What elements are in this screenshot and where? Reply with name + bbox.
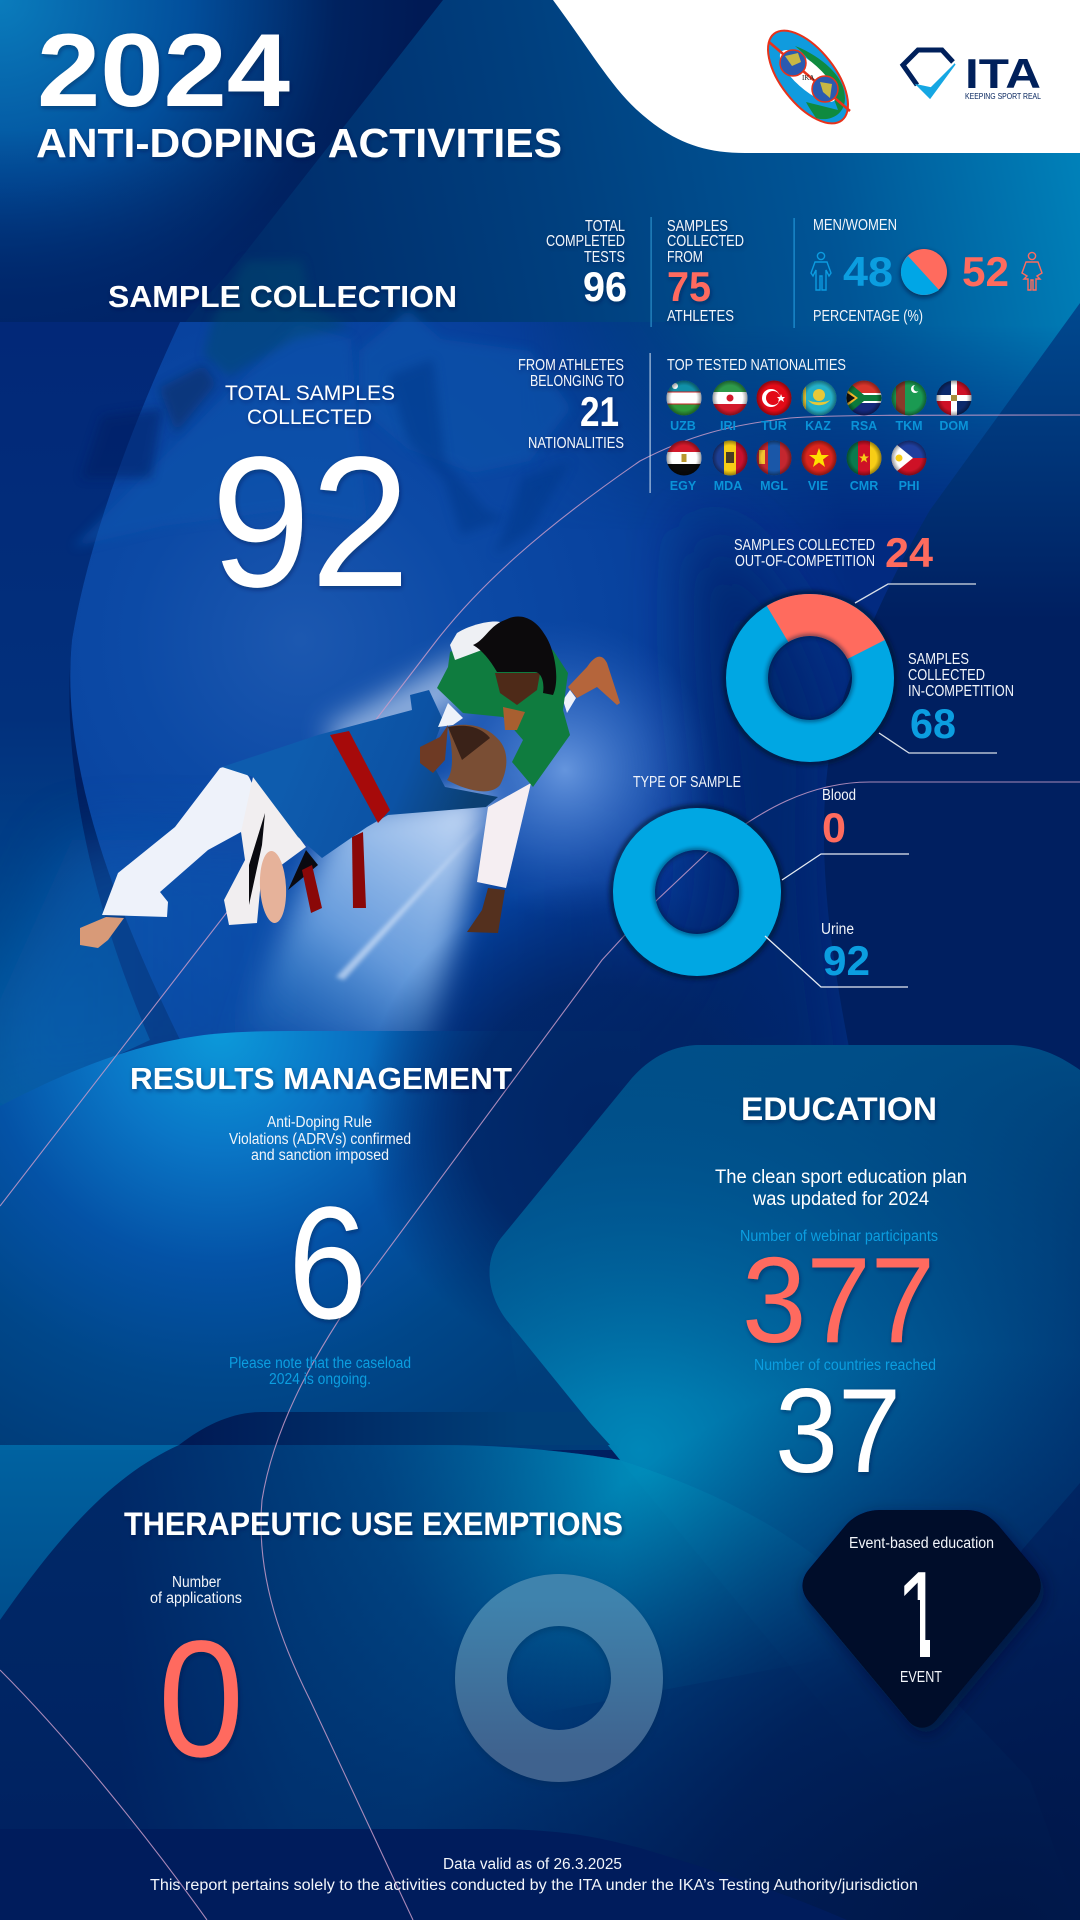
stat: countries reached: 37 (775, 1364, 901, 1498)
heading: sample collection: SAMPLE COLLECTION (108, 279, 457, 314)
stat: webinar participants: 377 (742, 1232, 935, 1368)
note: caseload: Please note that the caseload (229, 1355, 411, 1372)
panel: event-based education: 1 (896, 1546, 944, 1682)
flag: IRI (712, 380, 748, 416)
callout: in competition: COLLECTED (908, 667, 985, 684)
white header panel (553, 0, 1080, 153)
title: 2024 (37, 13, 290, 129)
label: number of applications (150, 1574, 242, 1607)
top-left band (0, 0, 442, 270)
label: number of applications: of applications (150, 1590, 242, 1607)
dark glow to the right (669, 527, 848, 1045)
flag labels row 1: TKM (895, 419, 923, 433)
chart: samples by competition donut (725, 593, 895, 763)
hanging belt ends (302, 832, 366, 913)
panel: results management (130, 1061, 512, 1388)
callout: out of competition: OUT-OF-COMPETITION (735, 553, 875, 570)
flag labels row 2: CMR (850, 479, 878, 493)
stat: athletes: SAMPLES (667, 218, 728, 235)
stat: nationalities: FROM ATHLETES (518, 357, 624, 374)
text: plan (715, 1167, 967, 1210)
flag labels row 1: TUR (761, 419, 787, 433)
panel: education (715, 1091, 967, 1498)
stat: athletes (667, 218, 744, 325)
mat left (0, 322, 180, 1110)
stat: total completed tests (546, 218, 627, 310)
hand under chin (503, 707, 525, 730)
stat: total completed tests: TOTAL (585, 218, 625, 235)
pie: men women (900, 249, 948, 298)
note: caseload (229, 1355, 411, 1388)
note: caseload: 2024 is ongoing. (269, 1371, 371, 1388)
flag: RSA (846, 380, 882, 416)
lower body band (0, 818, 319, 1094)
stat: countries reached: Number of countries reached (754, 1357, 936, 1374)
icon: woman (1022, 252, 1042, 290)
total samples collected: TOTAL SAMPLES (225, 382, 395, 405)
text: plan: The clean sport education plan (715, 1167, 967, 1188)
badge shape (802, 1510, 1041, 1728)
education panel (490, 1046, 1080, 1558)
panel: event-based education: EVENT (900, 1669, 942, 1686)
stat: total completed tests: 96 (583, 263, 627, 310)
callout: blood: 0 (822, 804, 846, 851)
dark hair (473, 616, 556, 695)
stat: athletes: COLLECTED (667, 233, 744, 250)
top-right panel behind the stats (180, 0, 1080, 330)
raised foot (568, 657, 620, 705)
callout: blood (782, 787, 909, 880)
description: adrvs: Anti-Doping Rule (267, 1114, 372, 1131)
stat: men / women: PERCENTAGE (%) (813, 308, 923, 325)
total samples collected: 92 (211, 419, 410, 626)
logo: ITA: KEEPING SPORT REAL (965, 91, 1041, 101)
number: applications: 0 (158, 1607, 244, 1792)
flag: DOM (936, 380, 972, 416)
light beams (325, 650, 470, 765)
arm (420, 725, 448, 773)
heading: results management: RESULTS MANAGEMENT (130, 1061, 512, 1096)
flag: KAZ (801, 380, 837, 416)
flag: UZB (666, 380, 702, 416)
top tested nationalities (666, 357, 972, 493)
footer (150, 1856, 918, 1894)
white sleeve (438, 703, 463, 727)
flag labels row 2: VIE (808, 479, 828, 493)
heading: education: EDUCATION (741, 1091, 937, 1127)
white collar (450, 622, 500, 660)
flag: PHI (891, 440, 927, 476)
label: type of sample: TYPE OF SAMPLE (633, 774, 741, 791)
title (36, 13, 562, 166)
text: plan: was updated for 2024 (752, 1189, 929, 1210)
flag: MGL (756, 440, 792, 476)
callout: in competition: IN-COMPETITION (908, 683, 1014, 700)
blonde hair (447, 725, 506, 791)
stat: men / women: 48 (843, 248, 893, 295)
dark band with tip (179, 1412, 610, 1445)
dark navy right triangle (1022, 1484, 1080, 1574)
number: adrvs: 6 (288, 1173, 367, 1352)
total samples collected: COLLECTED (247, 406, 372, 429)
chart: type of sample donut (612, 807, 782, 977)
label: number of applications: Number (172, 1574, 221, 1591)
flag: EGY (666, 440, 702, 476)
description: adrvs: Violations (ADRVs) confirmed (229, 1131, 411, 1148)
flag: MDA (712, 440, 748, 476)
stat: men / women: 52 (962, 248, 1009, 295)
highlight where panels overlap (455, 1446, 814, 1688)
stat: countries reached (754, 1357, 936, 1498)
flag labels row 1: DOM (939, 419, 969, 433)
callout: in competition: 68 (910, 700, 956, 747)
callout: in competition: SAMPLES (908, 651, 969, 668)
heading: tue: THERAPEUTIC USE EXEMPTIONS (124, 1506, 623, 1542)
face (495, 673, 540, 705)
flag labels row 1: IRI (720, 419, 736, 433)
faded photo of athletes (73, 261, 571, 555)
red belt (330, 731, 390, 823)
callout: out of competition: 24 (885, 529, 934, 576)
flag: CMR (846, 440, 882, 476)
flag labels row 1: RSA (851, 419, 877, 433)
therapeutic panel (0, 1445, 820, 1842)
blue jacket (222, 690, 498, 858)
stat: total completed tests: TESTS (584, 249, 625, 266)
foot sole (258, 850, 288, 924)
chart: pale empty donut (481, 1600, 637, 1760)
footer: Data valid as of 26.3.2025 (443, 1856, 622, 1873)
callout: urine: 92 (823, 937, 870, 984)
title: ANTI-DOPING ACTIVITIES (36, 120, 562, 166)
stem extension of the numeral 1 (920, 1640, 930, 1657)
dark slivers (249, 813, 318, 905)
flag labels row 2: PHI (899, 479, 919, 493)
right navy (824, 303, 1080, 1100)
flag labels row 2 (670, 479, 919, 493)
logo: ITA (903, 50, 1041, 101)
panel: event-based education (802, 1510, 1041, 1728)
logo: IKA (753, 17, 863, 137)
results panel (0, 1031, 640, 1450)
supporting foot (467, 888, 505, 933)
flag: VIE (801, 440, 837, 476)
panel: therapeutic use exemptions (124, 1506, 637, 1792)
green jacket (437, 633, 570, 787)
description: adrvs (229, 1114, 411, 1164)
stat: athletes: 75 (667, 263, 711, 310)
callout: out of competition: SAMPLES COLLECTED (734, 537, 875, 554)
left foot (80, 917, 124, 948)
flag: TUR (756, 380, 792, 416)
stat: nationalities: NATIONALITIES (528, 435, 624, 452)
stat: total completed tests: COMPLETED (546, 233, 625, 250)
stat: men / women (811, 217, 1042, 325)
white trousers (102, 690, 576, 925)
stat: nationalities (518, 357, 624, 452)
logo: IKA: IKA (802, 74, 814, 82)
stat: athletes: FROM (667, 249, 703, 266)
flag labels row 2: EGY (670, 479, 697, 493)
description: adrvs: and sanction imposed (251, 1147, 389, 1164)
callout: urine (765, 921, 908, 987)
callout: blood: Blood (822, 787, 856, 804)
flag labels row 2: MDA (714, 479, 742, 493)
footer: This report pertains solely to the activities conducted by the ITA under the IKA’s Testing Authority/jurisdiction (150, 1877, 918, 1894)
logo: ITA: ITA (965, 50, 1041, 97)
illustration: two kurash athletes (80, 616, 620, 948)
flag labels row 2: MGL (760, 479, 788, 493)
callout: out of competition (734, 529, 976, 603)
top tested nationalities: TOP TESTED NATIONALITIES (667, 357, 846, 374)
flag labels row 1: UZB (670, 419, 696, 433)
stat: webinar participants: Number of webinar participants (740, 1228, 938, 1245)
icon: man (811, 252, 831, 290)
top panel fading into the body on the right (635, 322, 1066, 494)
stat: athletes: ATHLETES (667, 308, 734, 325)
flag labels row 1 (670, 419, 969, 433)
callout: urine: Urine (821, 921, 854, 938)
stat: men / women: MEN/WOMEN (813, 217, 897, 234)
central blue (70, 322, 1080, 1060)
panel: event-based education: Event-based education (849, 1535, 994, 1552)
stat: nationalities: BELONGING TO (530, 373, 624, 390)
decorative curved lines (0, 415, 1080, 1920)
footer band (0, 1829, 847, 1920)
stat: nationalities: 21 (580, 388, 619, 435)
flag labels row 1: KAZ (805, 419, 831, 433)
callout: in competition (879, 651, 1014, 753)
flag: TKM (891, 380, 927, 416)
